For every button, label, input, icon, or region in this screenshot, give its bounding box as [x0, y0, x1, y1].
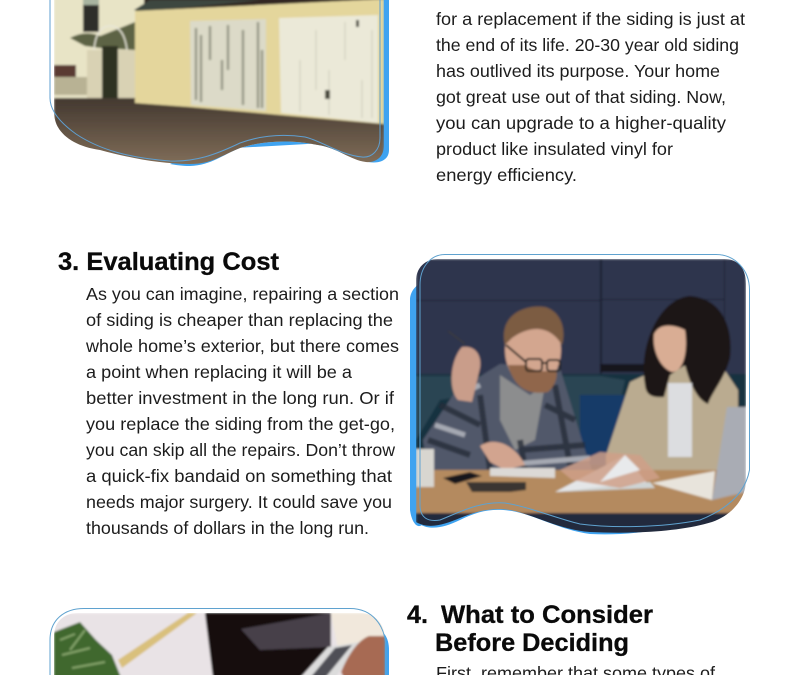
text block: siding age paragraph: product like insulated vinyl for — [436, 139, 673, 159]
text block: evaluating cost paragraph: a point when replacing it will be a — [86, 362, 352, 382]
text block: evaluating cost paragraph: you can skip all the repairs. Don’t throw — [86, 440, 395, 460]
text block: siding age paragraph: you can upgrade to a higher-quality — [436, 113, 726, 133]
heading: 4. What to Consider Before Deciding — [407, 601, 653, 657]
text block: evaluating cost paragraph: of siding is cheaper than replacing the — [86, 310, 393, 330]
photo: laptop on a desk with plant — [50, 608, 389, 675]
text block: evaluating cost paragraph: better investment in the long run. Or if — [86, 388, 394, 408]
text block: evaluating cost paragraph: thousands of dollars in the long run. — [86, 518, 369, 538]
text block: evaluating cost paragraph: you replace the siding from the get-go, — [86, 414, 395, 434]
text block: siding age paragraph: for a replacement if the siding is just at — [436, 9, 745, 29]
text block: evaluating cost paragraph — [85, 284, 399, 538]
text block: siding age paragraph: got great use out of that siding. Now, — [436, 87, 726, 107]
photo: weathered garage doors — [50, 0, 389, 170]
heading: 4. What to Consider Before Deciding: Before Deciding — [435, 629, 629, 657]
text block: siding age paragraph: the end of its life. 20-30 year old siding — [436, 35, 739, 55]
text block: siding age paragraph — [436, 9, 745, 185]
heading: 3. Evaluating Cost: 3. Evaluating Cost — [58, 248, 280, 276]
heading: 4. What to Consider Before Deciding: What to Consider — [441, 601, 653, 629]
man's head — [503, 327, 563, 373]
text block: evaluating cost paragraph: a quick-fix bandaid on something that — [86, 466, 392, 486]
man's shirt — [423, 364, 592, 475]
text block: evaluating cost paragraph: As you can imagine, repairing a section — [86, 284, 399, 304]
woman's jacket — [606, 363, 738, 475]
text block: siding age paragraph: has outlived its purpose. Your home — [436, 61, 720, 81]
table — [416, 470, 746, 515]
photo: couple reviewing bills at a table — [410, 254, 750, 543]
heading: 4. What to Consider Before Deciding: 4. — [407, 601, 428, 629]
text block: evaluating cost paragraph: needs major surgery. It could save you — [86, 492, 392, 512]
text block: siding age paragraph: energy efficiency. — [436, 165, 577, 185]
text block: evaluating cost paragraph: whole home’s exterior, but there comes — [85, 336, 399, 356]
woman's hair — [644, 296, 731, 404]
